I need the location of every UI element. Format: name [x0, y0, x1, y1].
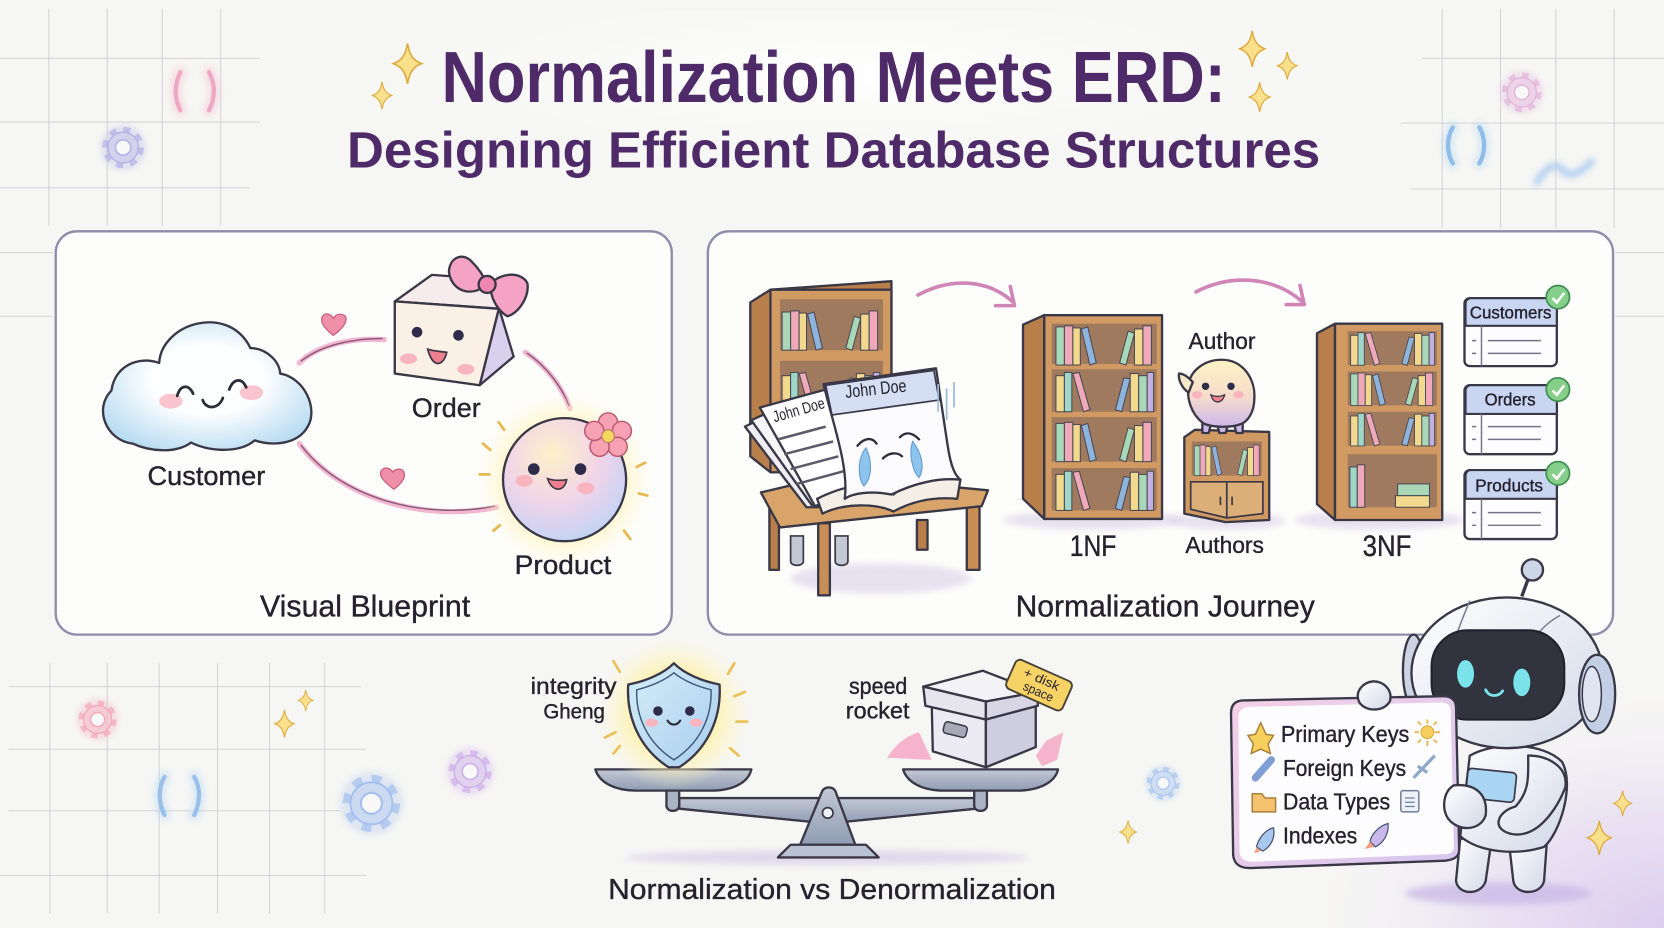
label: garbled word under integrity: Gheng — [543, 700, 605, 723]
icon: disk space tag: + disk — [1021, 664, 1063, 694]
icon: open book — [817, 477, 960, 514]
label: integrity: integrity — [531, 673, 617, 699]
icon: paper stack — [745, 388, 857, 507]
arrow: to 3NF — [1196, 280, 1304, 305]
robot head — [1403, 559, 1615, 748]
label: speed: speed — [849, 673, 907, 699]
relationship lines — [299, 339, 570, 512]
balance scale section — [531, 637, 1074, 906]
label: author: Author — [1189, 328, 1256, 354]
label: product: Product — [515, 550, 612, 580]
info sign — [1231, 696, 1459, 868]
panel: visual blueprint — [56, 231, 672, 635]
icon: folder — [1252, 794, 1276, 812]
table: products: Products — [1475, 475, 1543, 495]
label: data types: Data Types — [1283, 789, 1390, 815]
background grid: bottom left — [0, 663, 366, 914]
decorative gears — [77, 70, 1544, 835]
label: authors: Authors — [1185, 532, 1264, 558]
icon: disk space tag: space — [1021, 678, 1056, 705]
table: customers — [1464, 285, 1570, 366]
icon: chain link — [1255, 760, 1271, 778]
icon: scale — [595, 769, 1058, 857]
icon: paper stack: John Doe — [771, 395, 827, 426]
table: orders — [1464, 378, 1570, 454]
icon: 1NF bookshelf — [1003, 315, 1183, 530]
sparkles — [275, 31, 1632, 855]
icon: rocket right — [1365, 824, 1388, 849]
label: indexes: Indexes — [1283, 823, 1357, 849]
label: foreign keys: Foreign Keys — [1283, 755, 1406, 781]
icon: author character — [1179, 360, 1254, 433]
panel: normalization journey — [708, 231, 1613, 635]
icon: clipboard — [1401, 791, 1419, 812]
icon: crying sheet: John Doe — [844, 376, 907, 402]
icon: star — [1248, 723, 1273, 753]
icon: customer cloud — [103, 322, 311, 450]
icon: denormalization box — [887, 671, 1063, 767]
icon: rocket left — [1254, 828, 1274, 853]
background grid: top right — [1401, 8, 1664, 316]
label: rocket: rocket — [846, 697, 910, 723]
icon: crying sheet — [824, 368, 960, 499]
icon: shield — [597, 637, 750, 790]
icon: authors cabinet — [1168, 430, 1285, 530]
label: primary keys: Primary Keys — [1281, 721, 1409, 747]
icon: disk space tag — [1004, 658, 1074, 712]
shadow under scale — [626, 850, 1029, 865]
icon: sun — [1415, 720, 1440, 746]
icon: desk — [761, 475, 988, 595]
decorative brackets and squiggle — [160, 72, 1592, 815]
label: order: Order — [412, 393, 481, 423]
robot hands — [1358, 681, 1486, 828]
title: Normalization Meets ERD: — [441, 38, 1226, 118]
panel caption: visual blueprint: Visual Blueprint — [260, 589, 471, 624]
icon: keys scribble — [1414, 756, 1435, 778]
label: customer: Customer — [148, 461, 265, 491]
icon: messy bookshelf — [750, 281, 891, 472]
label: 3NF: 3NF — [1363, 530, 1411, 563]
table: customers: Customers — [1470, 302, 1552, 322]
panel caption: normalization journey: Normalization Journey — [1016, 589, 1315, 624]
background grid: top left — [0, 8, 260, 316]
caption: normalization vs denormalization: Normalization vs Denormalization — [608, 874, 1056, 906]
table: products — [1464, 462, 1570, 539]
icon: product sphere — [478, 393, 652, 567]
table: orders: Orders — [1485, 389, 1536, 409]
robot body — [1456, 746, 1567, 892]
label: 1NF: 1NF — [1070, 530, 1116, 563]
icon: order cube — [395, 257, 528, 385]
arrow: to 1NF — [918, 283, 1015, 306]
icon: hearts — [322, 314, 404, 489]
shadow under robot — [1405, 882, 1592, 905]
robot mascot — [1231, 559, 1615, 905]
icon: 3NF bookshelf — [1295, 324, 1464, 530]
subtitle: Designing Efficient Database Structures — [347, 122, 1320, 179]
